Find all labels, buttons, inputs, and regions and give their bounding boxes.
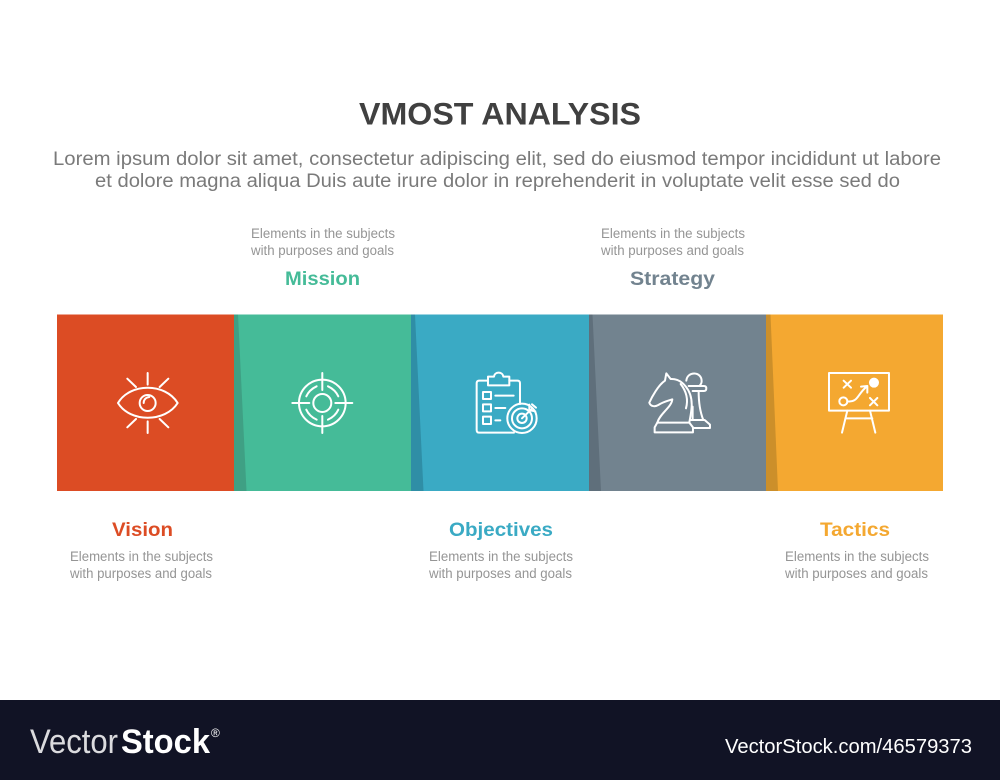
footer banner xyxy=(0,700,1000,780)
strategy description: with purposes and goals xyxy=(600,243,744,258)
mission description: with purposes and goals xyxy=(250,243,394,258)
tactics description: Elements in the subjects xyxy=(785,549,929,564)
objectives description: with purposes and goals xyxy=(428,566,572,581)
objectives description: Elements in the subjects xyxy=(429,549,573,564)
mission heading: Mission xyxy=(285,269,360,290)
footer logo xyxy=(30,723,220,761)
tactics description: with purposes and goals xyxy=(784,566,928,581)
tactics heading: Tactics xyxy=(820,520,890,541)
mission description xyxy=(250,226,395,258)
vision heading: Vision xyxy=(112,520,173,541)
panel: vision xyxy=(57,314,234,491)
vision description: Elements in the subjects xyxy=(70,549,213,564)
panel shadow xyxy=(411,314,424,491)
subtitle text block xyxy=(53,149,941,192)
subtitle text block: Lorem ipsum dolor sit amet, consectetur adipiscing elit, sed do eiusmod tempor incididunt ut labore xyxy=(53,149,941,170)
icon: eye xyxy=(118,373,178,433)
icon: strategy board xyxy=(829,373,889,433)
objectives description xyxy=(428,549,573,581)
strategy heading: Strategy xyxy=(630,269,715,290)
footer image id: VectorStock.com/46579373 xyxy=(725,736,972,758)
panel shadow xyxy=(234,314,246,491)
subtitle text block: et dolore magna aliqua Duis aute irure dolor in reprehenderit in voluptate velit esse sed do xyxy=(95,171,900,192)
panel shadow xyxy=(589,314,601,491)
panel shadow xyxy=(766,314,778,491)
footer logo: Stock xyxy=(121,723,210,761)
strategy description xyxy=(600,226,745,258)
vision description xyxy=(69,549,213,581)
panel: objectives xyxy=(411,314,590,491)
objectives heading: Objectives xyxy=(449,520,553,541)
icon: target crosshair xyxy=(292,373,352,433)
panel: tactics xyxy=(766,314,943,491)
footer logo: Vector xyxy=(30,723,118,761)
footer logo: ® xyxy=(211,726,220,740)
tactics description xyxy=(784,549,929,581)
panel: mission xyxy=(234,314,412,491)
mission description: Elements in the subjects xyxy=(251,226,395,241)
panel: strategy xyxy=(589,314,766,491)
strategy description: Elements in the subjects xyxy=(601,226,745,241)
title: VMOST ANALYSIS xyxy=(359,96,641,132)
vision description: with purposes and goals xyxy=(69,566,212,581)
icon: clipboard and target xyxy=(477,373,537,433)
icon: chess knight and pawn xyxy=(649,373,710,432)
